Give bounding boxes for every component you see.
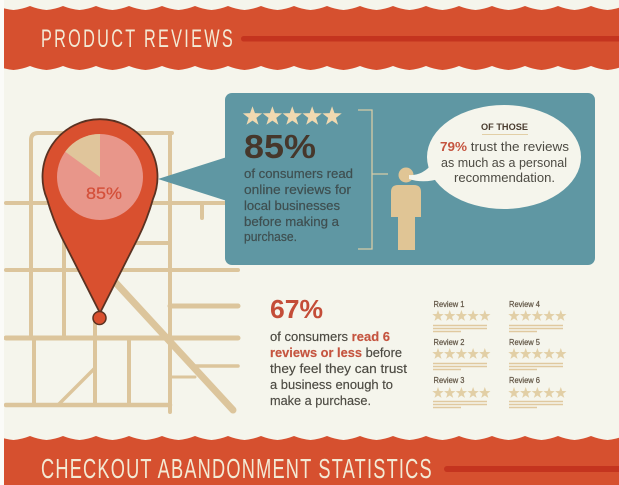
left margin strip [0, 0, 4, 485]
description text [244, 167, 353, 244]
review 4: Review 4 [509, 300, 541, 309]
67 percent stat: 67% [270, 294, 323, 324]
big stat 85%: 85% [244, 128, 316, 165]
review 2: Review 2 [434, 338, 465, 347]
review 5: Review 5 [509, 338, 541, 347]
67 percent description: a business enough to [270, 378, 393, 392]
callout pointer [158, 157, 227, 201]
67 percent description: they feel they can trust [270, 362, 408, 376]
review 1: Review 1 [434, 300, 465, 309]
description text: of consumers read [244, 167, 353, 181]
of those label: OF THOSE [481, 122, 528, 132]
icon: five stars [243, 106, 342, 125]
bracket [358, 110, 388, 249]
city map roads [6, 133, 238, 412]
67 percent description [270, 330, 408, 408]
description text: online reviews for [244, 183, 351, 197]
review list [432, 300, 566, 408]
icon: person [391, 168, 421, 250]
review 6: Review 6 [509, 376, 541, 385]
bubble text [440, 140, 569, 185]
heading: product reviews: PRODUCT REVIEWS [41, 26, 233, 53]
bubble text: as much as a personal [441, 156, 567, 170]
67 percent description: make a purchase. [270, 394, 371, 408]
bottom banner [0, 436, 619, 485]
67 percent description: reviews or less before [270, 346, 402, 360]
67 percent description: of consumers read 6 [270, 330, 390, 344]
67 percent stat [270, 294, 408, 408]
description text: local businesses [244, 199, 340, 213]
top banner [0, 6, 619, 70]
panel: 85 percent stat [158, 93, 595, 265]
speech bubble [409, 105, 581, 209]
description text: purchase. [244, 230, 297, 244]
bubble text: recommendation. [454, 171, 555, 185]
pie chart 85% [57, 134, 143, 220]
bubble text: 79% trust the reviews [440, 140, 569, 154]
heading: checkout abandonment statistics: CHECKOUT ABANDONMENT STATISTICS [41, 454, 432, 485]
review 3: Review 3 [434, 376, 465, 385]
icon: map pin [42, 119, 157, 324]
pie chart 85%: 85% [86, 184, 122, 203]
description text: before making a [244, 215, 339, 229]
